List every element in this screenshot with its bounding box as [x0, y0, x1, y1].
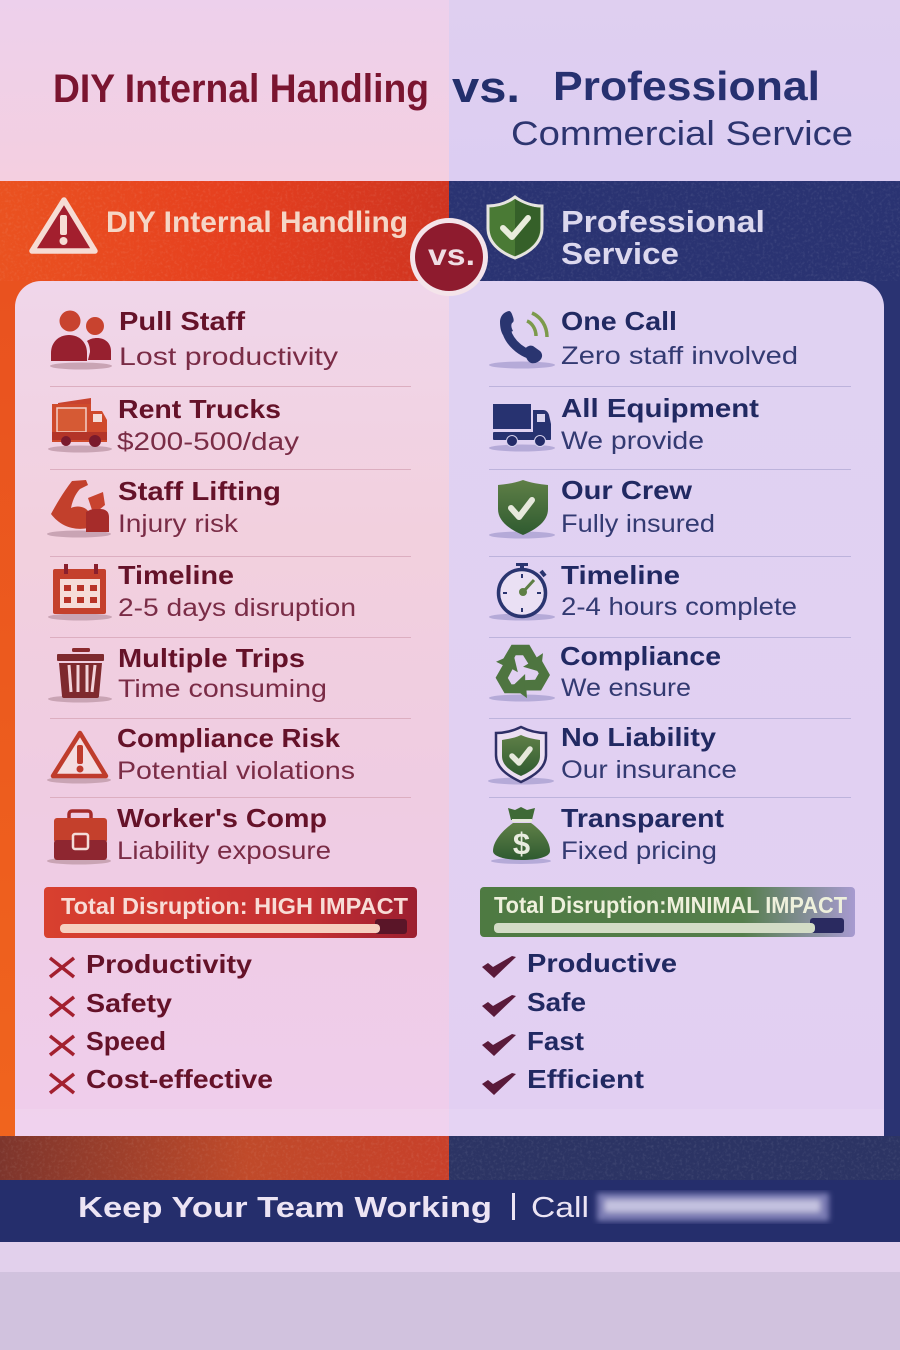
impact bar: DIY: Total Disruption: HIGH IMPACT	[61, 893, 408, 919]
bottom margin	[0, 1242, 900, 1350]
row: Pull Staff: Pull Staff	[119, 306, 245, 336]
row: No Liability: No Liability	[561, 722, 717, 752]
row: Pull Staff	[50, 306, 339, 371]
row: Timeline (DIY): 2-5 days disruption	[118, 594, 356, 622]
header background right	[449, 0, 900, 181]
icon: people	[50, 310, 112, 370]
x item: Speed	[50, 1026, 166, 1056]
footer bar: Call	[531, 1192, 589, 1224]
heading: DIY column	[32, 200, 408, 251]
row: Transparent	[491, 803, 724, 865]
row: No Liability	[488, 722, 737, 784]
check item: Safe	[482, 987, 586, 1017]
row: Timeline (professional): 2-4 hours complete	[561, 593, 797, 621]
title: Professional	[553, 63, 820, 109]
icon: briefcase	[47, 811, 111, 864]
x item: Speed: Speed	[86, 1026, 166, 1056]
row: Pull Staff: Lost productivity	[119, 343, 339, 371]
check item: Productive: Productive	[527, 948, 677, 978]
x item: Productivity: Productivity	[86, 949, 253, 979]
row: Compliance: We ensure	[561, 674, 691, 702]
row: Staff Lifting: Injury risk	[118, 510, 239, 538]
blurred phone number	[597, 1193, 829, 1221]
heading: professional column	[488, 197, 765, 271]
impact bar: professional	[480, 887, 855, 937]
heading: professional column: Service	[561, 236, 679, 271]
check item: Fast: Fast	[527, 1026, 584, 1056]
heading: professional column: Professional	[561, 204, 765, 239]
icon: warning outline	[47, 733, 111, 784]
row: All Equipment	[489, 393, 759, 455]
row: No Liability: Our insurance	[561, 756, 737, 784]
title	[53, 63, 853, 153]
dividers	[50, 386, 411, 798]
row: Rent Trucks: Rent Trucks	[118, 394, 281, 424]
check item: Fast	[482, 1026, 584, 1056]
background band right	[449, 181, 900, 1136]
vs badge: vs.	[428, 239, 475, 272]
row: Worker's Comp: Liability exposure	[117, 837, 331, 865]
heading: DIY column: DIY Internal Handling	[106, 206, 408, 239]
row: One Call: One Call	[561, 306, 677, 336]
row: Rent Trucks	[48, 394, 300, 456]
check item: Productive	[482, 948, 677, 978]
row: Worker's Comp: Worker's Comp	[117, 803, 327, 833]
row: Our Crew	[489, 475, 715, 538]
row: Compliance Risk: Potential violations	[117, 757, 355, 785]
row: Timeline (DIY)	[48, 560, 356, 622]
row: Our Crew: Fully insured	[561, 510, 715, 538]
icon: warning triangle	[32, 200, 95, 251]
x item: Safety	[50, 988, 173, 1018]
panel bottom lip	[15, 1109, 884, 1136]
icon: outlined shield check	[488, 727, 554, 784]
row: Timeline (DIY): Timeline	[118, 560, 234, 590]
panel: DIY	[15, 281, 449, 1136]
row: All Equipment: All Equipment	[561, 393, 759, 423]
icon: green shield	[488, 197, 542, 258]
check item: Efficient	[482, 1064, 644, 1095]
row: Compliance: Compliance	[560, 641, 721, 671]
icon: phone	[489, 311, 555, 368]
strip left	[0, 1136, 449, 1180]
icon: truck	[48, 398, 112, 452]
footer bar: Keep Your Team Working	[78, 1192, 492, 1224]
x item: Safety: Safety	[86, 988, 173, 1018]
row: One Call: Zero staff involved	[561, 342, 798, 370]
icon: recycle	[489, 645, 555, 702]
row: All Equipment: We provide	[561, 427, 704, 455]
title: vs.	[452, 63, 520, 112]
vs badge	[410, 218, 488, 296]
row: Multiple Trips: Time consuming	[118, 675, 327, 703]
row: Compliance Risk	[47, 723, 355, 785]
title: DIY Internal Handling	[53, 67, 429, 111]
row: Our Crew: Our Crew	[561, 475, 693, 505]
icon: stopwatch	[489, 563, 555, 620]
panel: professional	[449, 281, 884, 1136]
checklist: professional	[482, 948, 677, 1095]
footer bar	[0, 1180, 900, 1242]
row: Staff Lifting	[47, 476, 281, 538]
icon: money bag: $	[513, 826, 530, 861]
icon: shield check	[489, 480, 555, 538]
row: Multiple Trips: Multiple Trips	[118, 643, 305, 673]
icon: delivery truck	[489, 404, 555, 452]
row: Transparent: Fixed pricing	[561, 837, 717, 865]
icon: calendar	[48, 564, 112, 620]
row: One Call	[489, 306, 798, 370]
background band left	[0, 181, 449, 1136]
icon: trash bin	[48, 648, 112, 702]
impact bar: DIY	[44, 887, 417, 938]
header background left	[0, 0, 449, 181]
row: Compliance	[489, 641, 721, 702]
impact bar: professional: Total Disruption:MINIMAL IMPACT	[494, 892, 847, 918]
row: Rent Trucks: $200-500/day	[117, 428, 300, 456]
band texture	[0, 181, 900, 1242]
row: Worker's Comp	[47, 803, 331, 865]
checklist: DIY	[50, 949, 273, 1094]
x item: Cost-effective: Cost-effective	[86, 1064, 273, 1094]
check item: Efficient: Efficient	[527, 1064, 644, 1094]
row: Compliance Risk: Compliance Risk	[117, 723, 341, 753]
icon: flexed arm	[47, 480, 111, 538]
check item: Safe: Safe	[527, 987, 586, 1017]
row: Multiple Trips	[48, 643, 327, 703]
row: Staff Lifting: Staff Lifting	[118, 476, 281, 506]
row: Timeline (professional): Timeline	[561, 560, 680, 590]
strip right	[449, 1136, 900, 1180]
row: Transparent: Transparent	[561, 803, 724, 833]
row: Timeline (professional)	[489, 560, 797, 621]
title: Commercial Service	[511, 115, 853, 153]
icon: money bag	[491, 807, 551, 864]
